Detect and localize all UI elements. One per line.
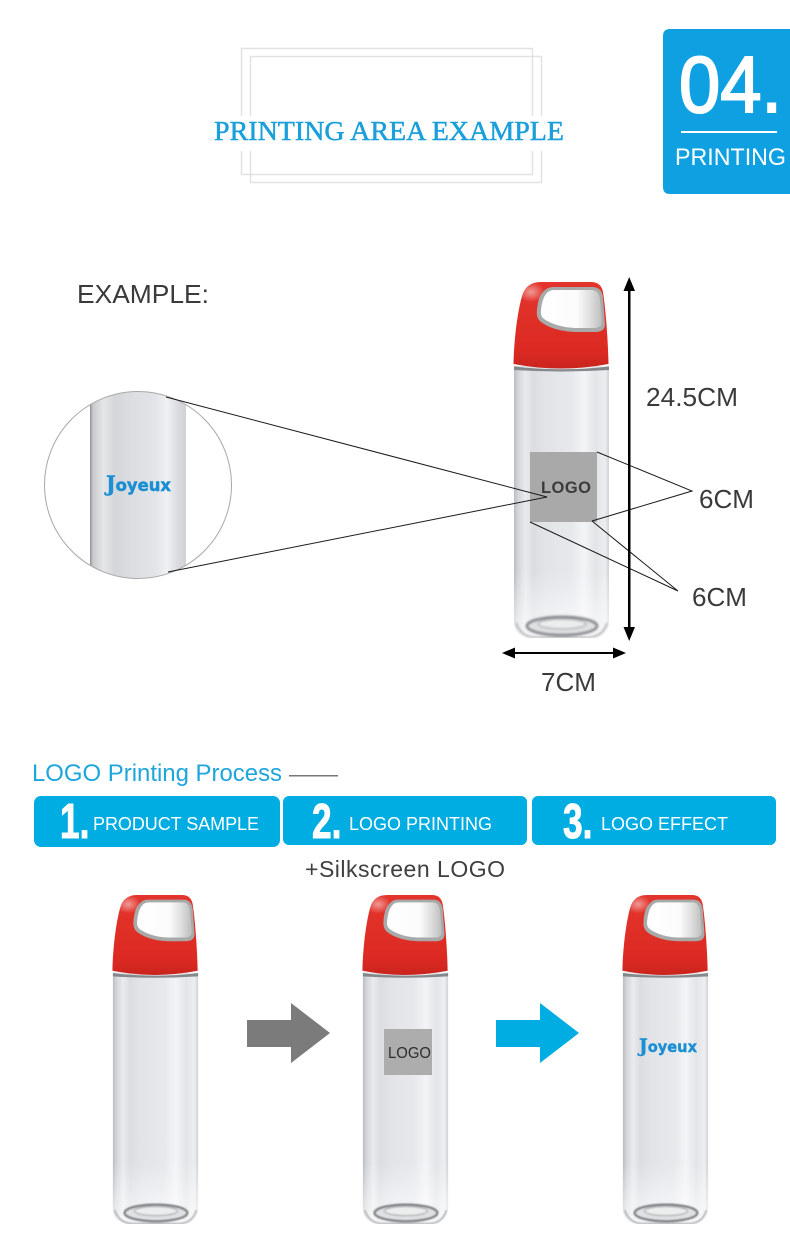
section badge: 04 printing: PRINTING (675, 144, 786, 171)
step 3 (532, 794, 776, 849)
bottle: logo printing (362, 895, 448, 1224)
title: PRINTING AREA EXAMPLE (214, 116, 564, 146)
dimension labels: 7CM (541, 667, 596, 697)
logo print area: LOGO (541, 479, 591, 497)
step 2: 2. (312, 794, 341, 849)
step 1: PRODUCT SAMPLE (93, 814, 259, 834)
joyeux logo on lens: Joyeux (104, 471, 171, 496)
silkscreen caption: +Silkscreen LOGO (305, 856, 505, 882)
width arrow (502, 648, 626, 658)
dimension labels: 6CM (699, 484, 754, 514)
blue arrow (496, 1003, 579, 1063)
title block (205, 48, 575, 182)
bottle: product sample (112, 895, 198, 1224)
logo placeholder (384, 1029, 432, 1075)
logo placeholder: LOGO (388, 1045, 431, 1062)
step 3: LOGO EFFECT (601, 814, 728, 834)
dimension labels: 24.5CM (646, 382, 738, 412)
leader lines (166, 397, 692, 591)
main bottle (514, 282, 609, 638)
example label: EXAMPLE: (77, 279, 209, 309)
section badge: 04 printing (663, 29, 790, 194)
magnified lens (44, 385, 232, 585)
step 2: LOGO PRINTING (349, 814, 492, 834)
step 1: 1. (60, 794, 89, 849)
joyeux logo: Joyeux (637, 1035, 697, 1057)
process heading: LOGO Printing Process (32, 760, 282, 787)
logo print area (530, 452, 597, 522)
section badge: 04 printing: 04. (679, 40, 782, 129)
step 1 (34, 794, 280, 849)
bottle: logo effect (622, 895, 708, 1224)
grey arrow (247, 1003, 330, 1063)
step 3: 3. (563, 794, 592, 849)
height arrow (624, 277, 635, 641)
dimension labels: 6CM (692, 582, 747, 612)
dimension labels (541, 382, 754, 697)
step 2 (283, 794, 527, 849)
